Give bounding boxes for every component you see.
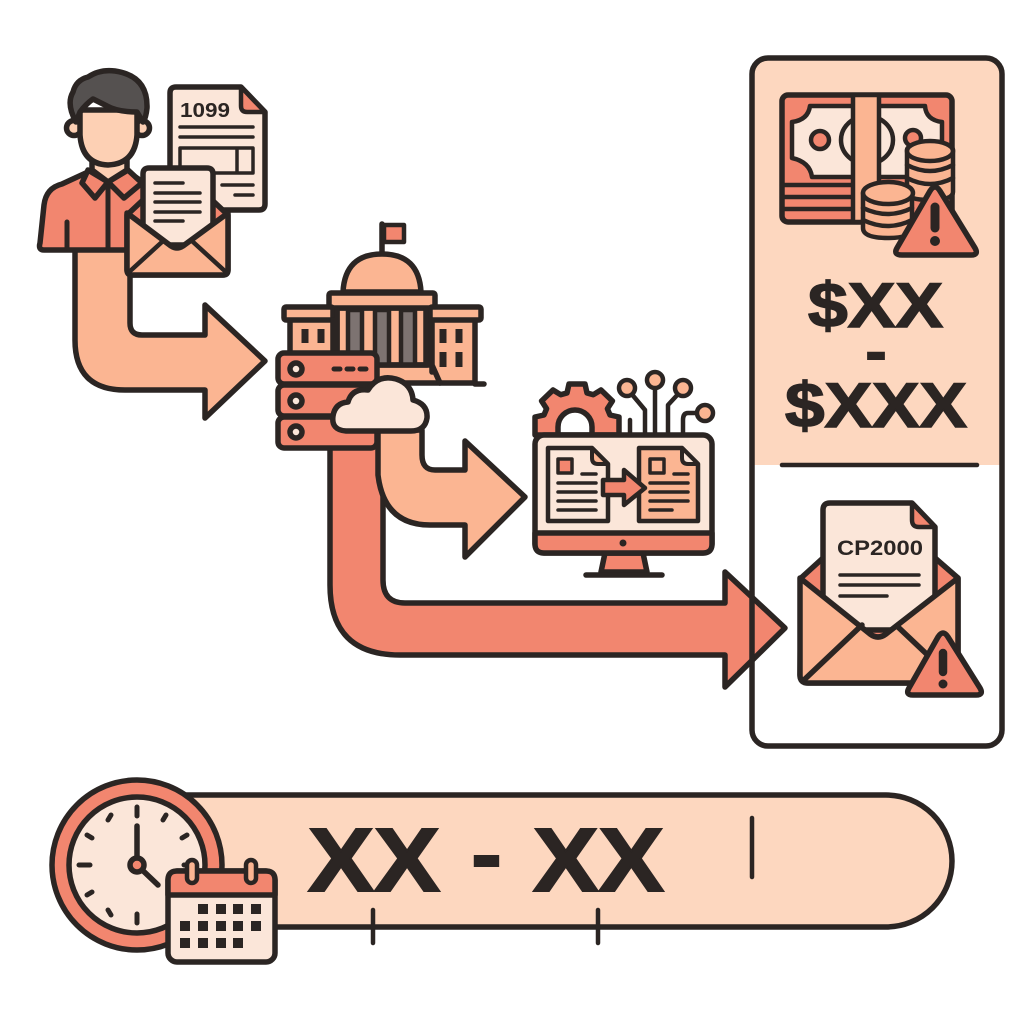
text: penalty range: $XX <box>808 271 943 341</box>
short coin stack <box>863 182 913 238</box>
panel: outcome column <box>752 58 1002 746</box>
icon: 1099 form <box>170 87 265 210</box>
icon: cloud <box>333 378 427 431</box>
icon: circuit nodes <box>619 372 713 436</box>
icon: CP2000 notice envelope <box>800 503 981 695</box>
text: timeframe start: XX <box>308 811 440 911</box>
text: dash: - <box>470 797 503 909</box>
source document <box>548 448 608 521</box>
arrow: IRS to matching system (peach) <box>378 430 525 557</box>
icon: clock <box>52 780 222 950</box>
form number: 1099 <box>180 100 230 122</box>
icon: cash stack and coins <box>782 95 976 255</box>
text: penalty range: $XXX <box>785 371 967 441</box>
icon: government building <box>284 224 484 384</box>
icon: computer monitor <box>535 435 712 575</box>
text: timeframe end: XX <box>533 811 664 911</box>
text: penalty range: - <box>864 311 888 389</box>
notice code: CP2000 <box>837 537 923 560</box>
text: penalty range <box>785 271 967 441</box>
transfer arrow <box>603 470 645 505</box>
warning triangle <box>896 187 976 255</box>
panel: timeline bar <box>180 795 952 943</box>
timeline ticks <box>373 818 752 943</box>
icon: taxpayer person <box>40 71 150 250</box>
warning triangle <box>908 633 981 695</box>
target document <box>639 448 698 521</box>
icon: calendar <box>168 860 275 962</box>
icon: server stack <box>278 353 377 448</box>
tall coin stack <box>907 141 953 200</box>
arrow: taxpayer to IRS <box>75 245 265 418</box>
arrow: IRS to underreporter match (large coral) <box>330 442 785 687</box>
icon: envelope with letter <box>127 168 228 275</box>
icon: gear <box>535 384 619 435</box>
